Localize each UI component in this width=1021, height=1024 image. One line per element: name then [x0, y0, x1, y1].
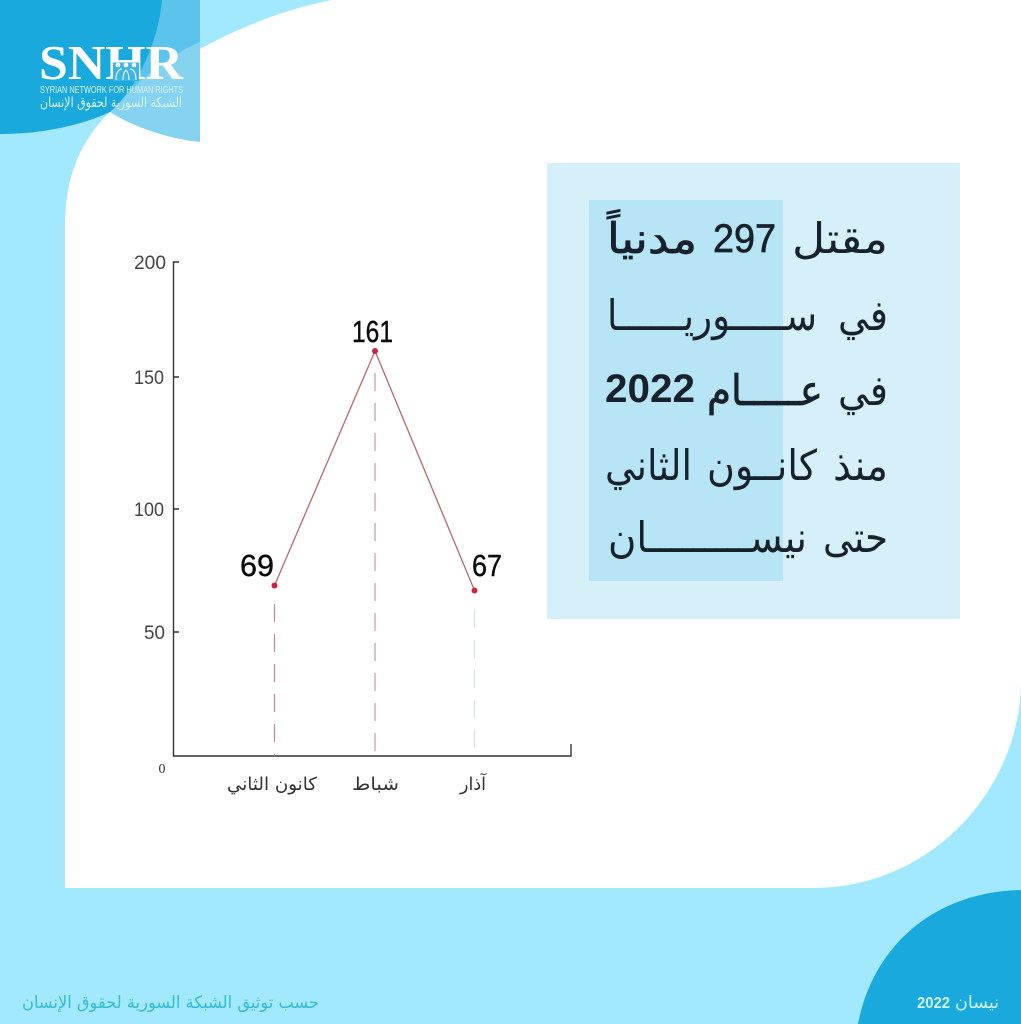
logo corner block [0, 0, 200, 142]
line 3: عـــــام [707, 366, 823, 415]
logo people icon [113, 60, 139, 81]
logo wordmark: SNHR [39, 35, 184, 90]
line chart [134, 253, 571, 795]
data line [274, 351, 474, 590]
x axis labels [227, 772, 487, 795]
x axis labels: شباط [352, 774, 399, 795]
line 5: حتى [823, 513, 888, 562]
y axis labels: 150 [134, 368, 164, 389]
x axis labels: آذار [459, 772, 487, 795]
line 3: في [838, 366, 888, 416]
y axis labels: 100 [134, 500, 164, 521]
line 1 [606, 209, 888, 263]
line 3 [605, 366, 888, 416]
dashed drop lines [274, 373, 474, 756]
line 4: الثاني [605, 441, 692, 491]
line 3: 2022 [605, 367, 695, 411]
logo Arabic name: الشبكة السورية لحقوق الإنسان [40, 95, 182, 111]
line 4 [605, 441, 888, 491]
line 2: ســـــوريــــــا [607, 291, 817, 340]
corner date blob [858, 890, 1021, 1024]
logo: SNHR [39, 35, 184, 111]
axes [174, 262, 571, 756]
logo English name: SYRIAN NETWORK FOR HUMAN RIGHTS [40, 84, 183, 96]
data values: 161 [352, 314, 393, 349]
date [917, 993, 999, 1013]
zero label: 0 [158, 762, 166, 777]
line 1: مقتل [792, 214, 888, 263]
y axis labels: 50 [144, 623, 165, 644]
data values [240, 314, 502, 583]
line 4: منذ [833, 441, 888, 490]
y axis labels [134, 253, 166, 644]
data values: 69 [240, 548, 274, 583]
line 1: مدنياً [606, 209, 697, 263]
date: 2022 [917, 995, 950, 1012]
line 1: 297 [713, 217, 776, 261]
line 2: في [838, 291, 888, 341]
line 5: نيســـــــــان [608, 513, 807, 562]
panel: headline background [547, 163, 960, 619]
line 4: كانــون [707, 441, 817, 490]
data values: 67 [472, 548, 502, 583]
y axis labels: 200 [134, 253, 166, 274]
date: نيسان [955, 993, 999, 1013]
headline text [605, 209, 888, 562]
source note: حسب توثيق الشبكة السورية لحقوق الإنسان [22, 993, 319, 1013]
x axis labels: كانون الثاني [227, 774, 317, 795]
data points [272, 348, 478, 594]
panel: headline inner highlight [589, 200, 783, 581]
